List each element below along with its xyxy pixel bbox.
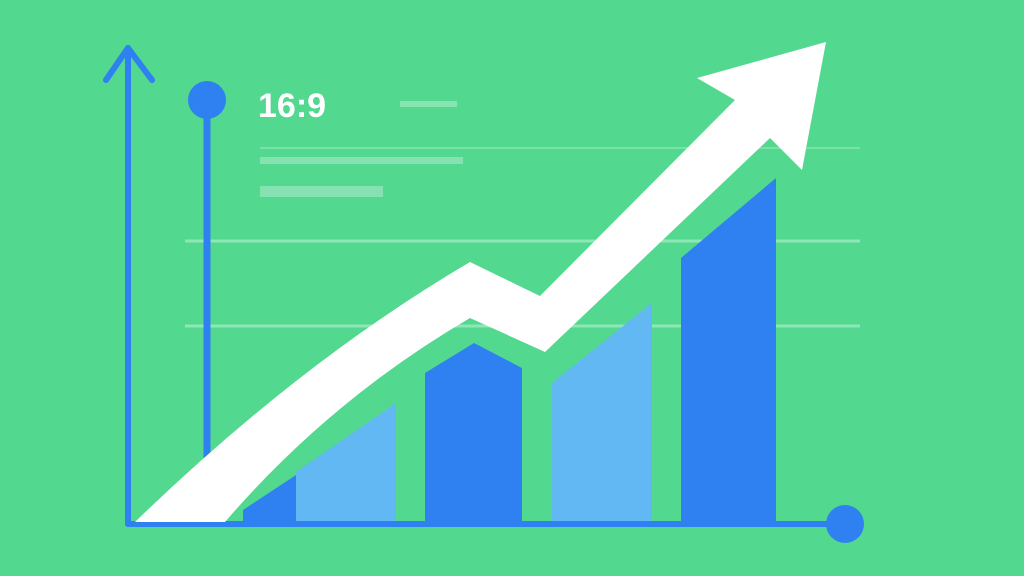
axes bbox=[106, 48, 845, 524]
x-axis end dot bbox=[826, 505, 864, 543]
vertical pin marker bbox=[188, 81, 226, 470]
bar chart bbox=[243, 178, 776, 522]
trend arrow bbox=[135, 42, 826, 522]
text placeholder lines bbox=[260, 101, 463, 197]
title: 16:9: 16:9 bbox=[258, 87, 326, 125]
